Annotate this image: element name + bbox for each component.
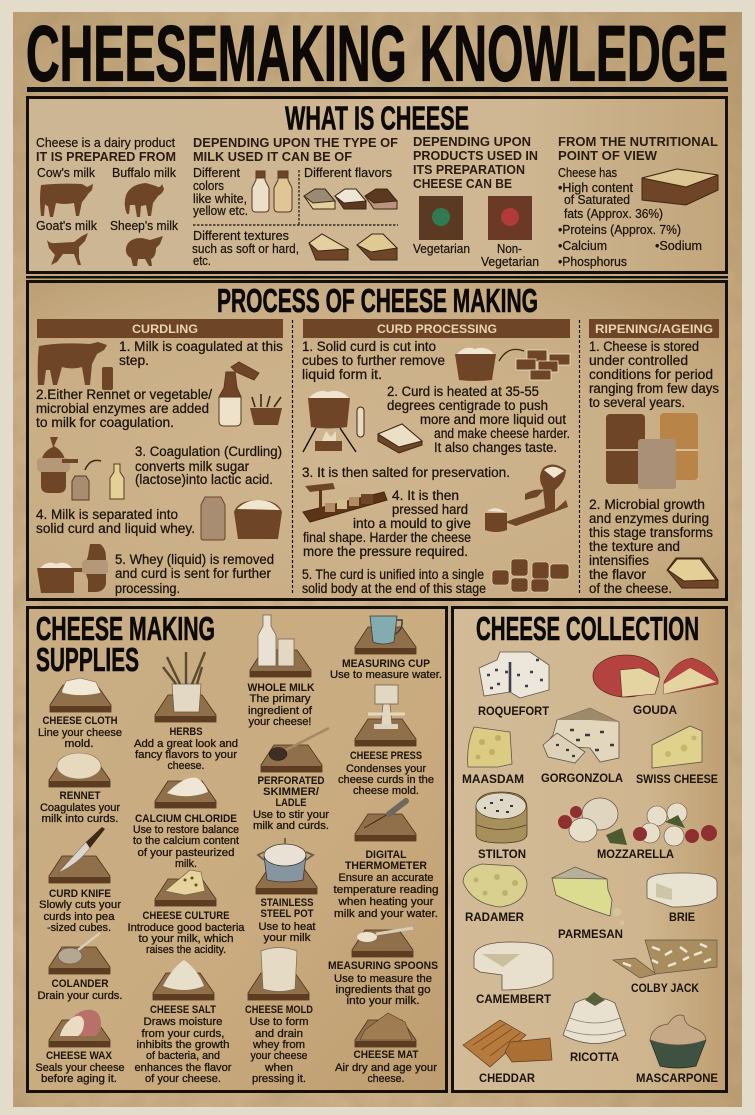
- cheese: colby jack: [613, 940, 717, 995]
- cheese: mascarpone: MASCARPONE: [636, 1072, 718, 1085]
- cheese: maasdam: [462, 727, 524, 786]
- supply: cheese salt: enhances the flavor: [134, 1062, 232, 1074]
- header: ripening: RIPENING/AGEING: [595, 322, 713, 336]
- text block: curdling steps: microbial enzymes are added: [36, 401, 209, 416]
- supply: digital thermometer: Ensure an accurate: [338, 872, 434, 884]
- text block: products used: Non-: [497, 241, 522, 256]
- supply: colander: Drain your curds.: [38, 990, 122, 1002]
- text block: curd processing steps: final shape. Harder the cheese: [303, 530, 471, 545]
- text block: ripening steps: the texture and: [589, 539, 680, 554]
- cheese: roquefort: ROQUEFORT: [478, 705, 549, 718]
- cheese: gorgonzola: GORGONZOLA: [541, 772, 624, 785]
- supply: cheese press: cheese mold.: [353, 785, 419, 797]
- text block: curdling steps: (lactose)into lactic acid.: [135, 472, 273, 487]
- text block: ripening steps: 1. Cheese is stored: [589, 339, 699, 354]
- text block: products used: [413, 134, 539, 269]
- supply: cheese mat: cheese.: [368, 1073, 404, 1085]
- cheese: parmesan: PARMESAN: [558, 928, 623, 941]
- text block: products used: ITS PREPARATION: [413, 162, 525, 177]
- supply: cheese press: CHEESE PRESS: [350, 750, 422, 762]
- supply: rennet: milk into curds.: [42, 813, 118, 825]
- icon: vegetarian mark: [419, 196, 463, 240]
- icon: ripened cheese block: [667, 558, 718, 588]
- text block: milk sources: Cheese is a dairy product: [36, 135, 175, 150]
- supply: curd knife: [39, 827, 121, 934]
- text block: ripening steps: under controlled: [589, 353, 688, 368]
- cheese: swiss: [636, 726, 718, 786]
- icon: non-vegetarian mark: [488, 196, 532, 240]
- supply: digital thermometer: [334, 801, 438, 920]
- panel: cheese collection: [452, 608, 726, 1092]
- text block: nutrition: •High content: [558, 180, 633, 195]
- text block: nutrition: Cheese has: [558, 165, 617, 180]
- supply: calcium chloride: to the calcium content: [133, 835, 240, 847]
- supply: cheese culture: [128, 870, 245, 956]
- text block: milk sources: Sheep's milk: [110, 218, 179, 233]
- supply: herbs: Add a great look and: [134, 738, 238, 750]
- icon: cheese press: [485, 464, 568, 532]
- supply: measuring spoons: ingredients that go: [336, 984, 430, 996]
- icon: curd pot and cubes: [455, 348, 570, 381]
- text block: type of milk: yellow etc.: [193, 203, 248, 218]
- supply: cheese mold: and drain: [255, 1028, 303, 1040]
- supply: cheese cloth: CHEESE CLOTH: [42, 715, 118, 727]
- icon: rennet bottle: [219, 362, 259, 426]
- icon: cow and bottle: [38, 342, 113, 390]
- text block: nutrition: of Saturated: [564, 192, 630, 207]
- text block: curd processing steps: solid body at the end of this stage: [302, 581, 486, 596]
- supply: cheese culture: CHEESE CULTURE: [142, 910, 230, 922]
- icon: sheep: [126, 236, 163, 266]
- supply: calcium chloride: Use to restore balance: [133, 824, 239, 836]
- icon: salting board: [303, 483, 387, 522]
- text block: curd processing steps: more and more liquid out: [420, 412, 566, 427]
- supply: stainless steel pot: STEEL POT: [260, 908, 314, 920]
- text block: ripening steps: of the cheese.: [589, 581, 672, 596]
- supply: cheese culture: Introduce good bacteria: [128, 922, 245, 934]
- supply: cheese mold: Use to form: [250, 1016, 308, 1028]
- supply: perforated skimmer: SKIMMER/: [263, 786, 319, 798]
- icon: ripening cheeses: [606, 413, 698, 489]
- text block: type of milk: MILK USED IT CAN BE OF: [193, 149, 352, 164]
- text block: nutrition: fats (Approx. 36%): [564, 206, 663, 221]
- text block: nutrition: [558, 134, 718, 269]
- text block: curd processing steps: It also changes taste.: [434, 440, 557, 455]
- cheese: radamer: RADAMER: [465, 911, 525, 924]
- supply: cheese mat: [335, 1013, 437, 1085]
- text block: curdling steps: 2.Either Rennet or vegetable/: [36, 387, 212, 402]
- supply: colander: [38, 933, 122, 1002]
- supply: measuring cup: MEASURING CUP: [342, 658, 430, 670]
- cheese: colby jack: COLBY JACK: [631, 982, 700, 995]
- supply: cheese wax: [36, 1010, 124, 1085]
- icon: milk bottles: [252, 171, 292, 212]
- heading: supplies: [36, 610, 215, 678]
- supply: cheese wax: Seals your cheese: [36, 1062, 124, 1074]
- header: curdling: CURDLING: [132, 322, 198, 336]
- supply: calcium chloride: milk.: [175, 858, 197, 870]
- supply: cheese mold: [245, 948, 313, 1085]
- supply: stainless steel pot: STAINLESS: [260, 897, 314, 909]
- cheese: swiss: SWISS CHEESE: [636, 773, 718, 786]
- supply: cheese mold: whey from: [252, 1039, 305, 1051]
- supply: herbs: [134, 652, 238, 772]
- supply: herbs: fancy flavors to your: [135, 749, 237, 761]
- icon: cow: [40, 184, 93, 217]
- icon: separator and bottles: [37, 437, 124, 500]
- supply: perforated skimmer: PERFORATED: [258, 775, 325, 787]
- supply: cheese mold: your cheese: [250, 1050, 308, 1062]
- heading: process: PROCESS OF CHEESE MAKING: [217, 282, 538, 319]
- header: curd processing: CURD PROCESSING: [377, 322, 497, 336]
- icon: buffalo: [125, 183, 164, 217]
- supply: measuring spoons: into your milk.: [346, 995, 420, 1007]
- icon: cheese slab: [378, 424, 422, 453]
- supply: rennet: [40, 753, 120, 825]
- icon: flavor cheeses: [304, 189, 397, 209]
- header: ripening: [589, 319, 719, 338]
- supply: perforated skimmer: [253, 728, 329, 832]
- icon: milk jar and curd pot: [201, 497, 282, 540]
- text block: ripening steps: ranging from few days: [589, 381, 719, 396]
- supply: curd knife: Slowly cuts your: [39, 899, 121, 911]
- text block: curdling steps: 5. Whey (liquid) is removed: [115, 552, 274, 567]
- cheese: stilton: [476, 792, 527, 861]
- text block: type of milk: such as soft or hard,: [192, 241, 299, 256]
- icon: cheese cubes: [492, 559, 569, 592]
- icon: cheese block: [642, 169, 718, 205]
- text block: type of milk: Different textures: [193, 228, 289, 243]
- supply: cheese mold: when: [264, 1062, 293, 1074]
- supply: cheese culture: to your milk, which: [138, 933, 234, 945]
- supply: cheese salt: Draws moisture: [144, 1016, 222, 1028]
- text block: curdling steps: converts milk sugar: [135, 459, 250, 474]
- supply: herbs: HERBS: [170, 726, 202, 738]
- supply: curd knife: CURD KNIFE: [49, 888, 111, 900]
- text block: products used: PRODUCTS USED IN: [413, 148, 538, 163]
- cheese: gorgonzola: [541, 708, 624, 785]
- supply: digital thermometer: temperature reading: [334, 884, 438, 896]
- header: curd processing: [303, 319, 570, 338]
- supply: rennet: RENNET: [60, 790, 101, 802]
- text block: curdling steps: to milk for coagulation.: [36, 415, 174, 430]
- text block: curdling steps: step.: [119, 353, 149, 368]
- cheese: maasdam: MAASDAM: [462, 773, 524, 786]
- text block: milk sources: Cow's milk: [37, 165, 96, 180]
- text block: nutrition: •Sodium: [655, 238, 702, 253]
- text block: products used: Vegetarian: [413, 241, 470, 256]
- supply: curd knife: curds into pea: [44, 911, 115, 923]
- text block: type of milk: like white,: [193, 191, 247, 206]
- text block: curdling steps: solid curd and liquid whey.: [36, 521, 195, 536]
- text block: curdling steps: [36, 339, 283, 596]
- text block: ripening steps: 2. Microbial growth: [589, 497, 705, 512]
- text block: ripening steps: and enzymes during: [589, 511, 709, 526]
- supply: herbs: cheese.: [168, 760, 204, 772]
- text block: products used: CHEESE CAN BE: [413, 176, 512, 191]
- supply: whole milk: [248, 615, 315, 728]
- panel: process of cheese making: [28, 282, 726, 600]
- heading: supplies: CHEESE MAKING: [36, 610, 215, 647]
- text block: nutrition: •Proteins (Approx. 7%): [558, 222, 681, 237]
- heading: what is cheese: WHAT IS CHEESE: [285, 100, 469, 136]
- text block: curd processing steps: more the pressure required.: [303, 544, 468, 559]
- icon: texture cheeses: [309, 234, 397, 260]
- text block: products used: DEPENDING UPON: [413, 134, 531, 149]
- supply: measuring cup: [330, 616, 442, 681]
- supply: cheese wax: before aging it.: [41, 1073, 117, 1085]
- supply: cheese mat: CHEESE MAT: [354, 1049, 419, 1061]
- cheese: brie: [647, 873, 717, 924]
- supply: whole milk: The primary: [250, 693, 311, 705]
- supply: calcium chloride: [133, 778, 240, 870]
- supply: cheese salt: of your cheese.: [145, 1073, 221, 1085]
- cheese: parmesan: [552, 867, 624, 941]
- supply: measuring spoons: MEASURING SPOONS: [328, 960, 438, 972]
- supply: cheese salt: of bacteria, and: [146, 1050, 220, 1062]
- text block: curd processing steps: into a mould to give: [353, 516, 471, 531]
- cheese: stilton: STILTON: [478, 848, 526, 861]
- supply: measuring spoons: Use to measure the: [334, 973, 432, 985]
- text block: curdling steps: 4. Milk is separated into: [36, 507, 178, 522]
- text block: type of milk: etc.: [193, 253, 211, 268]
- text block: curd processing steps: 4. It is then: [392, 488, 459, 503]
- supply: digital thermometer: milk and your water.: [334, 908, 438, 920]
- supply: perforated skimmer: LADLE: [276, 797, 306, 809]
- supply: measuring cup: Use to measure water.: [330, 669, 442, 681]
- text block: milk sources: IT IS PREPARED FROM: [36, 149, 176, 164]
- cheese: gouda: GOUDA: [633, 704, 678, 717]
- text block: products used: Vegetarian: [481, 254, 539, 269]
- text block: milk sources: [36, 135, 179, 233]
- cheese: mozzarella: MOZZARELLA: [597, 848, 675, 861]
- supply: cheese cloth: Line your cheese: [38, 727, 122, 739]
- text block: milk sources: Goat's milk: [36, 218, 98, 233]
- panel: what is cheese: [26, 98, 728, 278]
- supply: calcium chloride: of your pasteurized: [138, 847, 234, 859]
- supply: cheese culture: raises the acidity.: [146, 944, 226, 956]
- text block: curd processing steps: degrees centigrade to push: [387, 398, 548, 413]
- supply: whole milk: ingredient of: [248, 705, 313, 717]
- text block: ripening steps: the flavor: [589, 567, 647, 582]
- supply: whole milk: WHOLE MILK: [248, 682, 315, 694]
- cheese: radamer: [463, 864, 527, 924]
- text block: nutrition: •Calcium: [558, 238, 607, 253]
- text block: curd processing steps: 5. The curd is unified into a single: [302, 567, 484, 582]
- supply: curd knife: -sized cubes.: [47, 922, 111, 934]
- supply: cheese press: [338, 685, 434, 797]
- supply: calcium chloride: CALCIUM CHLORIDE: [135, 813, 237, 825]
- supply: stainless steel pot: Use to heat: [258, 921, 316, 933]
- supply: cheese mold: pressing it.: [252, 1073, 306, 1085]
- supply: measuring spoons: [328, 928, 438, 1007]
- text block: curd processing steps: 3. It is then salted for preservation.: [302, 465, 510, 480]
- text block: ripening steps: this stage transforms: [589, 525, 713, 540]
- supply: stainless steel pot: your milk: [264, 932, 311, 944]
- supply: cheese press: cheese curds in the: [338, 774, 434, 786]
- text block: curd processing steps: and make cheese harder.: [434, 426, 570, 441]
- text block: curd processing steps: [302, 339, 570, 596]
- icon: heated pot: [303, 391, 364, 452]
- text block: ripening steps: [589, 339, 719, 596]
- supply: digital thermometer: DIGITAL: [366, 849, 407, 861]
- cheese: brie: BRIE: [669, 911, 695, 924]
- supply: stainless steel pot: [256, 838, 317, 944]
- cheese: mascarpone: [636, 1015, 718, 1085]
- text block: ripening steps: conditions for period: [589, 367, 713, 382]
- supply: cheese mold: CHEESE MOLD: [245, 1004, 313, 1016]
- supply: cheese mat: Air dry and age your: [335, 1062, 437, 1074]
- panel: cheese making supplies: [28, 608, 446, 1092]
- cheese: mozzarella: [558, 798, 717, 861]
- header: curdling: [37, 319, 283, 338]
- text block: ripening steps: intensifies: [589, 553, 649, 568]
- text block: type of milk: colors: [193, 178, 224, 193]
- supply: digital thermometer: when heating your: [337, 896, 434, 908]
- text block: nutrition: •Phosphorus: [558, 254, 627, 269]
- icon: goat: [47, 233, 88, 265]
- text block: type of milk: Different flavors: [304, 165, 392, 180]
- supply: perforated skimmer: Use to stir your: [253, 809, 329, 821]
- cheese: cheddar: CHEDDAR: [479, 1072, 536, 1085]
- supply: digital thermometer: THERMOMETER: [345, 860, 427, 872]
- supply: cheese salt: from your curds,: [142, 1028, 224, 1040]
- text block: curdling steps: 3. Coagulation (Curdling): [135, 444, 282, 459]
- text block: milk sources: Buffalo milk: [112, 165, 177, 180]
- cheese: cheddar: [463, 1020, 552, 1085]
- cheese: ricotta: [563, 992, 626, 1064]
- supply: whole milk: your cheese!: [248, 716, 312, 728]
- cheese: gouda: [593, 655, 718, 717]
- text block: curd processing steps: liquid form it.: [302, 367, 382, 382]
- text block: type of milk: Different: [193, 165, 240, 180]
- text block: curd processing steps: 1. Solid curd is cut into: [302, 339, 436, 354]
- supply: cheese salt: inhibits the growth: [136, 1039, 230, 1051]
- text block: type of milk: [192, 135, 398, 268]
- text block: curd processing steps: cubes to further remove: [302, 353, 445, 368]
- supply: cheese salt: [134, 960, 232, 1085]
- text block: curd processing steps: 2. Curd is heated at 35-55: [387, 384, 539, 399]
- supply: rennet: Coagulates your: [40, 802, 120, 814]
- supply: cheese cloth: mold.: [64, 738, 94, 750]
- supply: cheese wax: CHEESE WAX: [46, 1050, 112, 1062]
- text block: ripening steps: to several years.: [589, 395, 685, 410]
- icon: herb bowl: [250, 394, 282, 425]
- text block: curdling steps: 1. Milk is coagulated at this: [119, 339, 283, 354]
- cheese: ricotta: RICOTTA: [570, 1051, 620, 1064]
- heading: supplies: SUPPLIES: [36, 641, 139, 678]
- text block: curdling steps: processing.: [115, 581, 180, 596]
- cheese: camembert: CAMEMBERT: [476, 993, 551, 1006]
- supply: perforated skimmer: milk and curds.: [253, 820, 329, 832]
- text block: curd processing steps: pressed hard: [392, 502, 468, 517]
- text block: curdling steps: and curd is sent for further: [115, 566, 272, 581]
- text block: nutrition: POINT OF VIEW: [558, 148, 658, 163]
- cheese: roquefort: [478, 652, 549, 718]
- supply: cheese salt: CHEESE SALT: [150, 1004, 216, 1016]
- supply: cheese cloth: [38, 678, 122, 750]
- cheese: camembert: [474, 942, 553, 1006]
- text block: type of milk: DEPENDING UPON THE TYPE OF: [193, 135, 398, 150]
- icon: pot and funnel: [37, 544, 108, 593]
- supply: colander: COLANDER: [52, 978, 109, 990]
- text block: nutrition: FROM THE NUTRITIONAL: [558, 134, 718, 149]
- supply: cheese press: Condenses your: [346, 763, 426, 775]
